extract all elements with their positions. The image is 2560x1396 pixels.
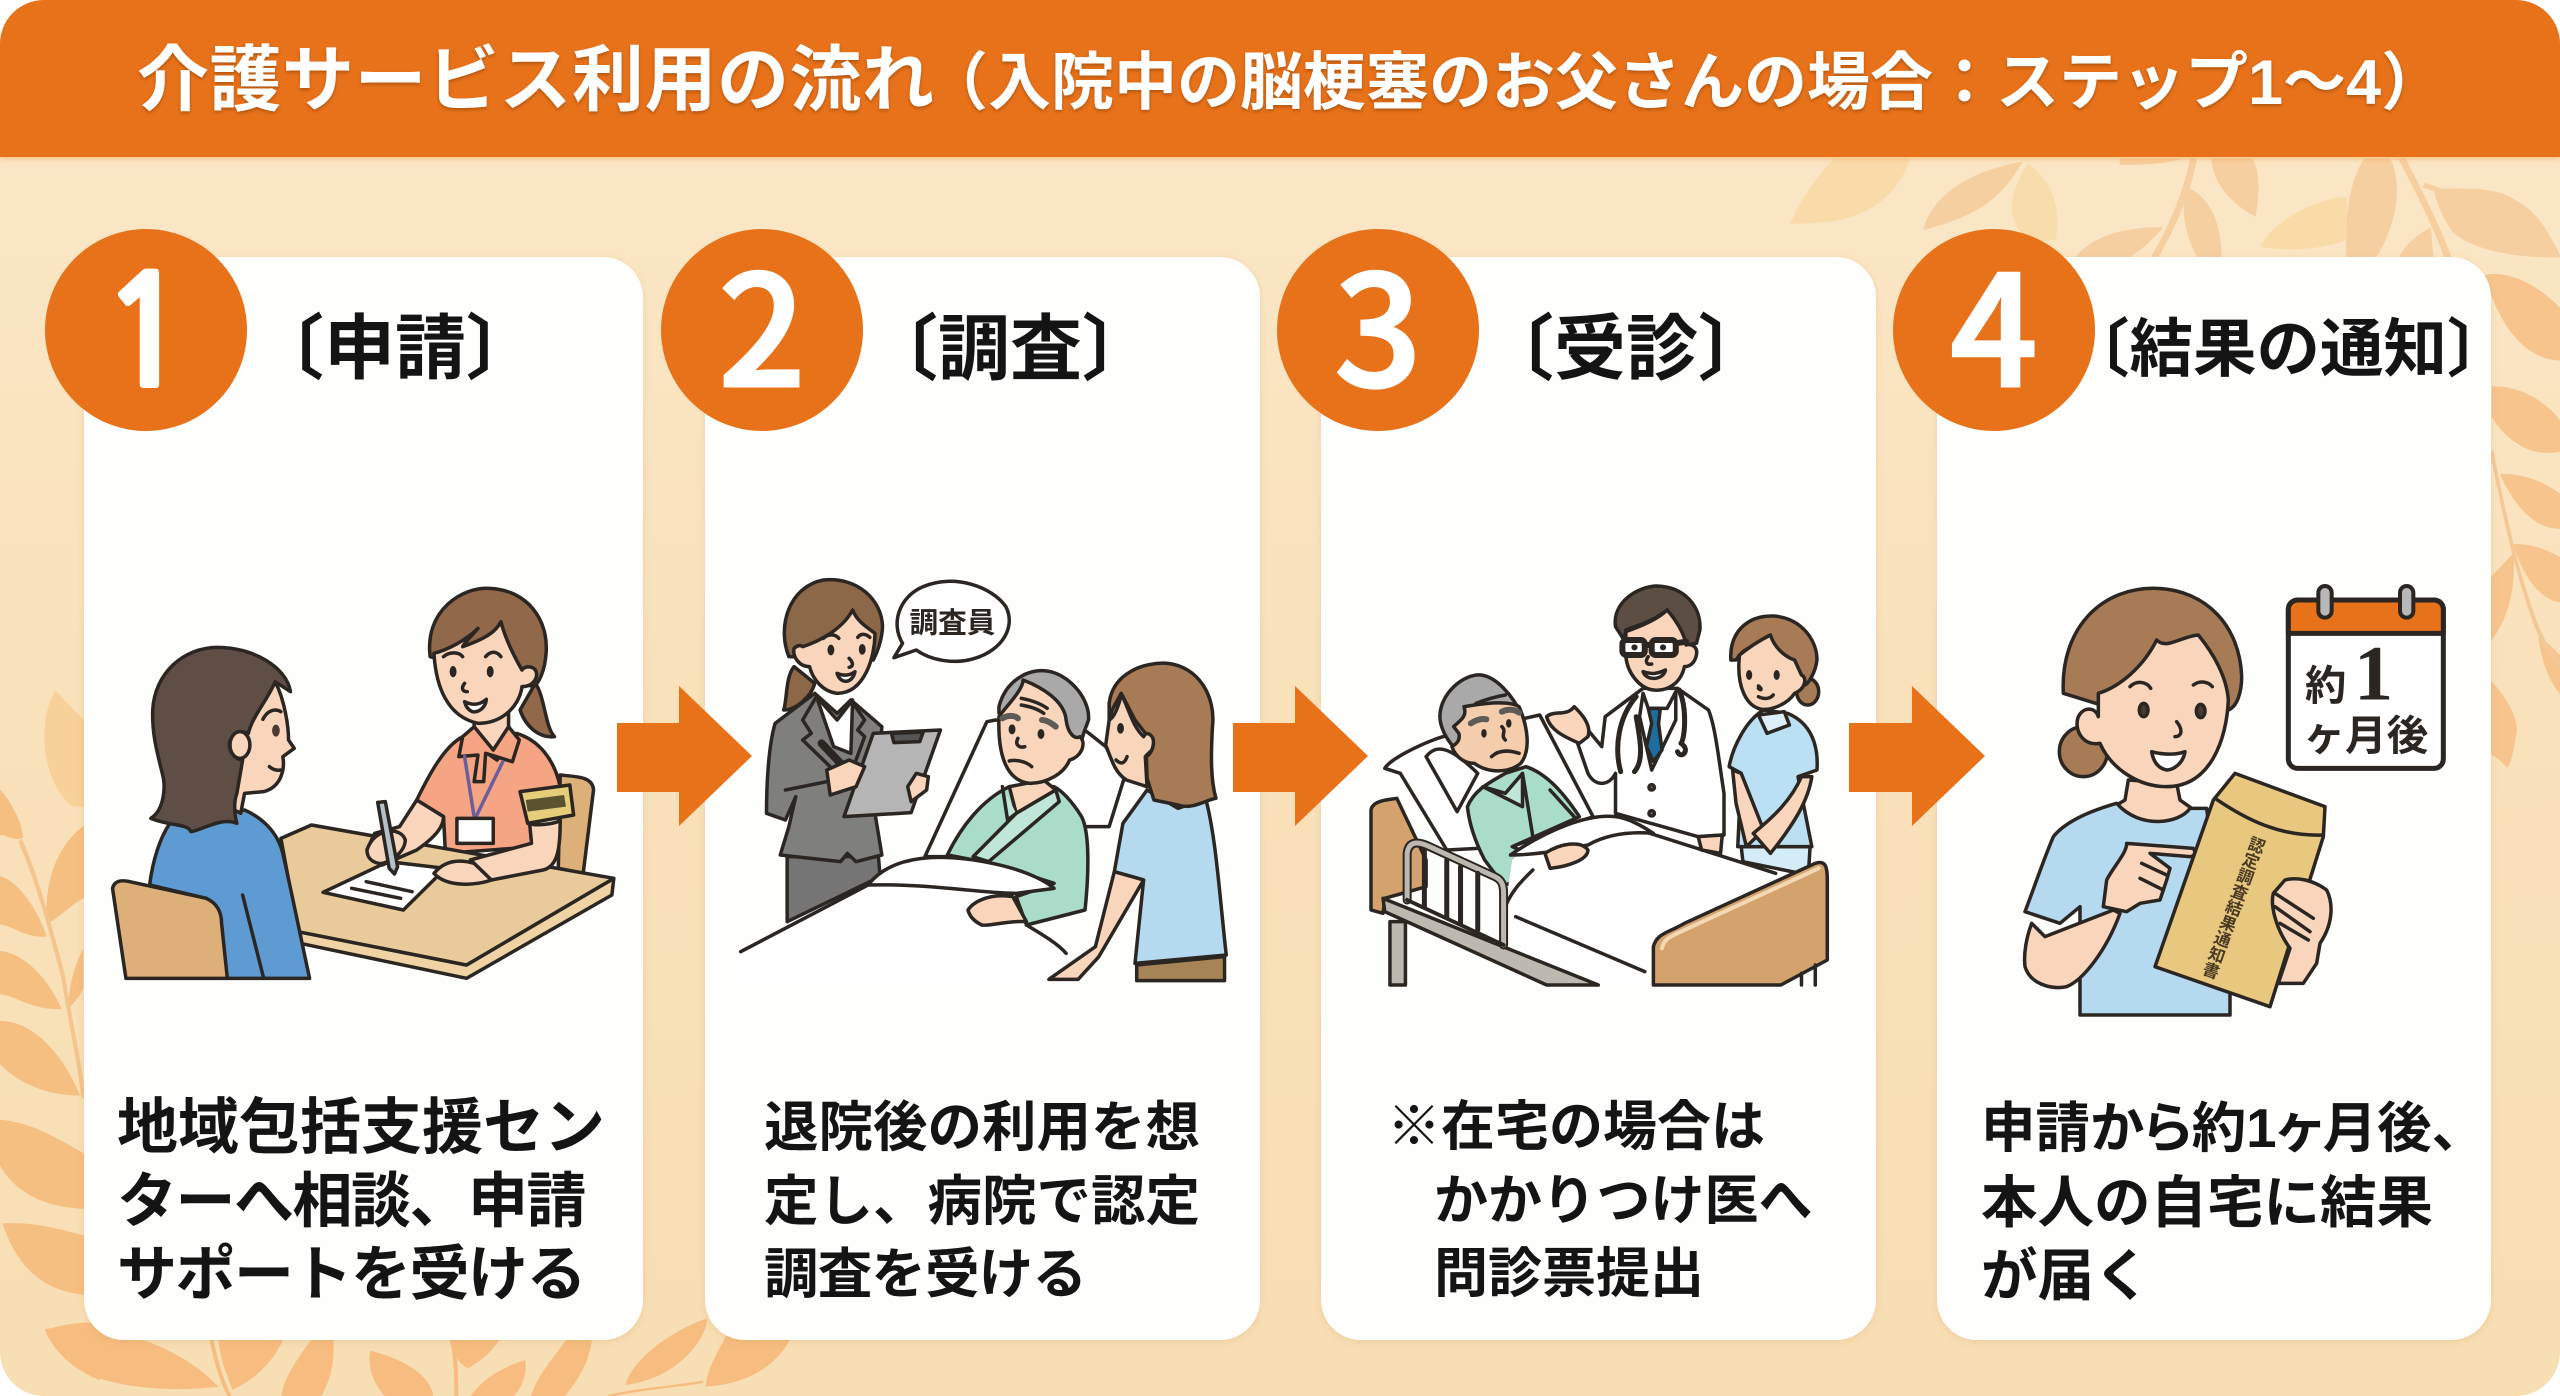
step 3 description: ※在宅の場合は	[1387, 1097, 1765, 1157]
panel: step 2	[705, 257, 1260, 1340]
speech bubble: 調査員	[909, 608, 995, 640]
panel: step 1	[84, 257, 643, 1340]
step 2 description	[764, 1097, 1200, 1305]
title sub: （入院中の脳梗塞のお父さんの場合：ステップ1～4）	[925, 48, 2444, 118]
step 3 number	[1277, 229, 1479, 431]
step 2 description: 退院後の利用を想	[764, 1097, 1200, 1158]
step 2 number	[661, 229, 863, 431]
step 1 heading: 〔申請〕	[253, 310, 537, 389]
illustration: daughter reading the result envelope: 認定調査結果通知書	[2198, 833, 2268, 981]
step 1 description: 地域包括支援セン	[117, 1093, 605, 1161]
step 1 description: サポートを受ける	[117, 1241, 585, 1308]
arrow 3 to 4	[1849, 686, 1985, 826]
step 3 number: 3	[1334, 210, 1422, 431]
calendar: ヶ月後	[2303, 712, 2428, 759]
step 4 heading: 〔結果の通知〕	[2066, 315, 2510, 385]
panel: step 4	[1937, 257, 2491, 1340]
step 2 description: 調査を受ける	[764, 1244, 1086, 1305]
step 3 heading: 〔受診〕	[1482, 310, 1770, 390]
illustration: doctor examination at the bedside	[1369, 584, 1830, 987]
illustration: consultation at a desk	[110, 586, 616, 980]
step 4 description: 本人の自宅に結果	[1981, 1170, 2433, 1234]
illustration: daughter reading the result envelope	[2022, 584, 2446, 1017]
step 3 description	[1387, 1097, 1813, 1304]
step 4 description	[1981, 1098, 2459, 1307]
step 4 description: が届く	[1981, 1244, 2150, 1307]
step 3 description: かかりつけ医へ	[1434, 1170, 1813, 1230]
step 2 number: 2	[718, 210, 806, 431]
arrow 2 to 3	[1233, 686, 1368, 826]
step 1 number: 1	[100, 257, 192, 409]
step 3 description: 問診票提出	[1434, 1244, 1704, 1304]
illustration: investigator visits the hospital	[738, 578, 1228, 982]
step 2 heading: 〔調査〕	[866, 310, 1154, 390]
title banner	[0, 0, 2560, 157]
panel: step 3	[1321, 257, 1876, 1340]
speech bubble	[894, 581, 1009, 661]
step 4 number: 4	[1950, 210, 2038, 431]
calendar: 約	[2305, 663, 2346, 709]
step 4 description: 申請から約1ヶ月後、	[1981, 1098, 2459, 1159]
step 1 description: ターへ相談、申請	[117, 1168, 585, 1234]
step 4 number	[1893, 229, 2095, 431]
arrow 1 to 2	[617, 686, 752, 826]
step 1 number	[45, 229, 247, 431]
calendar	[2288, 586, 2443, 768]
step 1 description	[117, 1093, 605, 1308]
step 2 description: 定し、病院で認定	[764, 1170, 1200, 1232]
calendar: 1	[2354, 629, 2393, 716]
title main: 介護サービス利用の流れ	[137, 41, 935, 121]
